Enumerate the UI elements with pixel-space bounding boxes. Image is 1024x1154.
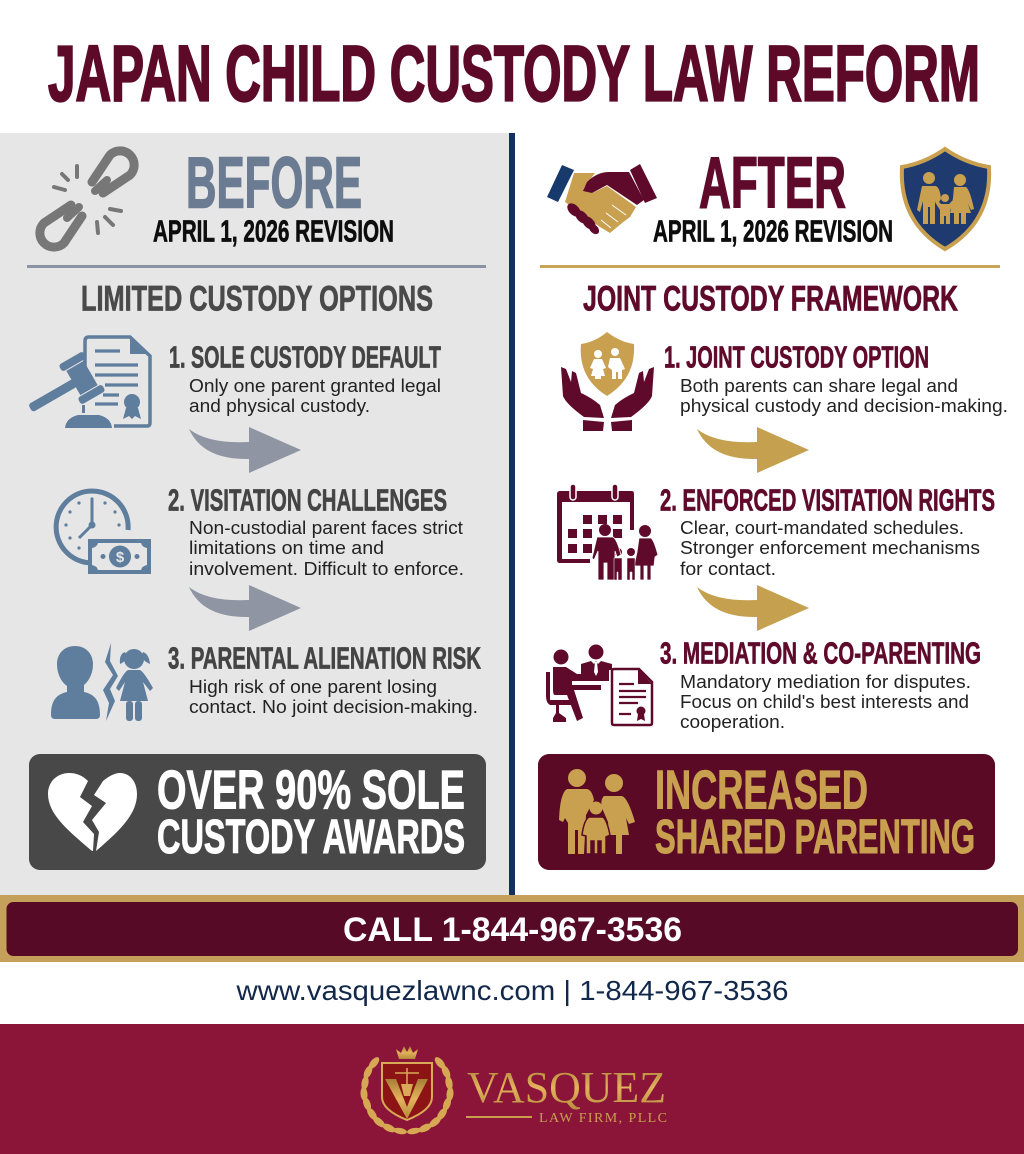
item 2 — [557, 482, 995, 580]
item text: Non-custodial parent faces strict — [189, 518, 463, 538]
icon: hands and shield — [561, 332, 654, 431]
item text: for contact. — [680, 559, 776, 579]
item 1 — [19, 337, 441, 428]
item 1 — [561, 332, 1008, 431]
item text — [189, 518, 464, 579]
icon: mediation — [546, 644, 652, 725]
item text: and physical custody. — [189, 396, 370, 416]
icon: clock and money — [56, 491, 151, 574]
item 2 — [56, 482, 464, 579]
item text: contact. No joint decision-making. — [189, 697, 478, 717]
item 3 — [51, 640, 481, 721]
item text: limitations on time and — [189, 538, 384, 558]
subheading: LIMITED CUSTODY OPTIONS — [81, 280, 433, 318]
footer — [0, 1024, 1024, 1154]
item text: Both parents can share legal and — [680, 376, 958, 396]
icon: family shield — [902, 149, 989, 249]
heading: after: AFTER — [699, 144, 846, 224]
laurels — [360, 1055, 454, 1135]
logo wordmark: VASQUEZ — [467, 1063, 666, 1112]
item text — [680, 672, 971, 732]
item text — [189, 677, 478, 717]
icon: broken chain — [40, 151, 134, 247]
crown — [396, 1046, 418, 1059]
icon: separated parent and child — [51, 643, 153, 721]
icon: handshake — [547, 164, 657, 236]
call to action band — [0, 895, 1024, 962]
callout text: CUSTODY AWARDS — [157, 811, 465, 864]
arrow — [189, 427, 301, 473]
item heading: 2. VISITATION CHALLENGES — [168, 482, 447, 518]
contact line: www.vasquezlawnc.com | 1-844-967-3536 — [235, 975, 789, 1006]
callout: shared parenting — [538, 754, 995, 870]
call to action band: CALL 1-844-967-3536 — [343, 911, 682, 949]
icon: clock and money: $ — [116, 549, 125, 566]
icon: calendar and family — [557, 484, 658, 580]
item text: cooperation. — [680, 712, 785, 732]
item text: Only one parent granted legal — [189, 376, 441, 396]
callout text: INCREASED — [655, 758, 868, 820]
item text: physical custody and decision-making. — [680, 396, 1008, 416]
item text — [680, 376, 1008, 416]
callout text — [655, 758, 975, 864]
item text: involvement. Difficult to enforce. — [189, 559, 464, 579]
callout text: OVER 90% SOLE — [157, 758, 465, 820]
date: APRIL 1, 2026 REVISION — [153, 214, 394, 248]
item 3 — [546, 636, 981, 732]
callout text — [157, 758, 465, 864]
item text — [680, 518, 980, 579]
logo emblem — [360, 1046, 454, 1135]
item text: Focus on child's best interests and — [680, 692, 969, 712]
item text: High risk of one parent losing — [189, 677, 437, 697]
divider — [509, 133, 515, 895]
item text: Stronger enforcement mechanisms — [680, 538, 980, 558]
icon: broken heart — [48, 773, 137, 851]
arrow — [189, 585, 301, 631]
icon: gavel and document — [19, 337, 150, 428]
callout: over 90% — [29, 754, 486, 870]
item heading: 1. SOLE CUSTODY DEFAULT — [169, 340, 441, 374]
icon: family — [559, 769, 635, 854]
item text: Clear, court-mandated schedules. — [680, 518, 964, 538]
heading: before: BEFORE — [186, 144, 362, 224]
arrow — [697, 585, 809, 631]
logo wordmark: LAW FIRM, PLLC — [539, 1111, 667, 1126]
item heading: 3. PARENTAL ALIENATION RISK — [168, 640, 481, 676]
arrow — [697, 427, 809, 473]
panel: before — [0, 133, 509, 895]
item text: Mandatory mediation for disputes. — [680, 672, 971, 692]
panel: after — [538, 144, 1008, 870]
item text — [189, 376, 441, 416]
date: APRIL 1, 2026 REVISION — [653, 214, 893, 248]
